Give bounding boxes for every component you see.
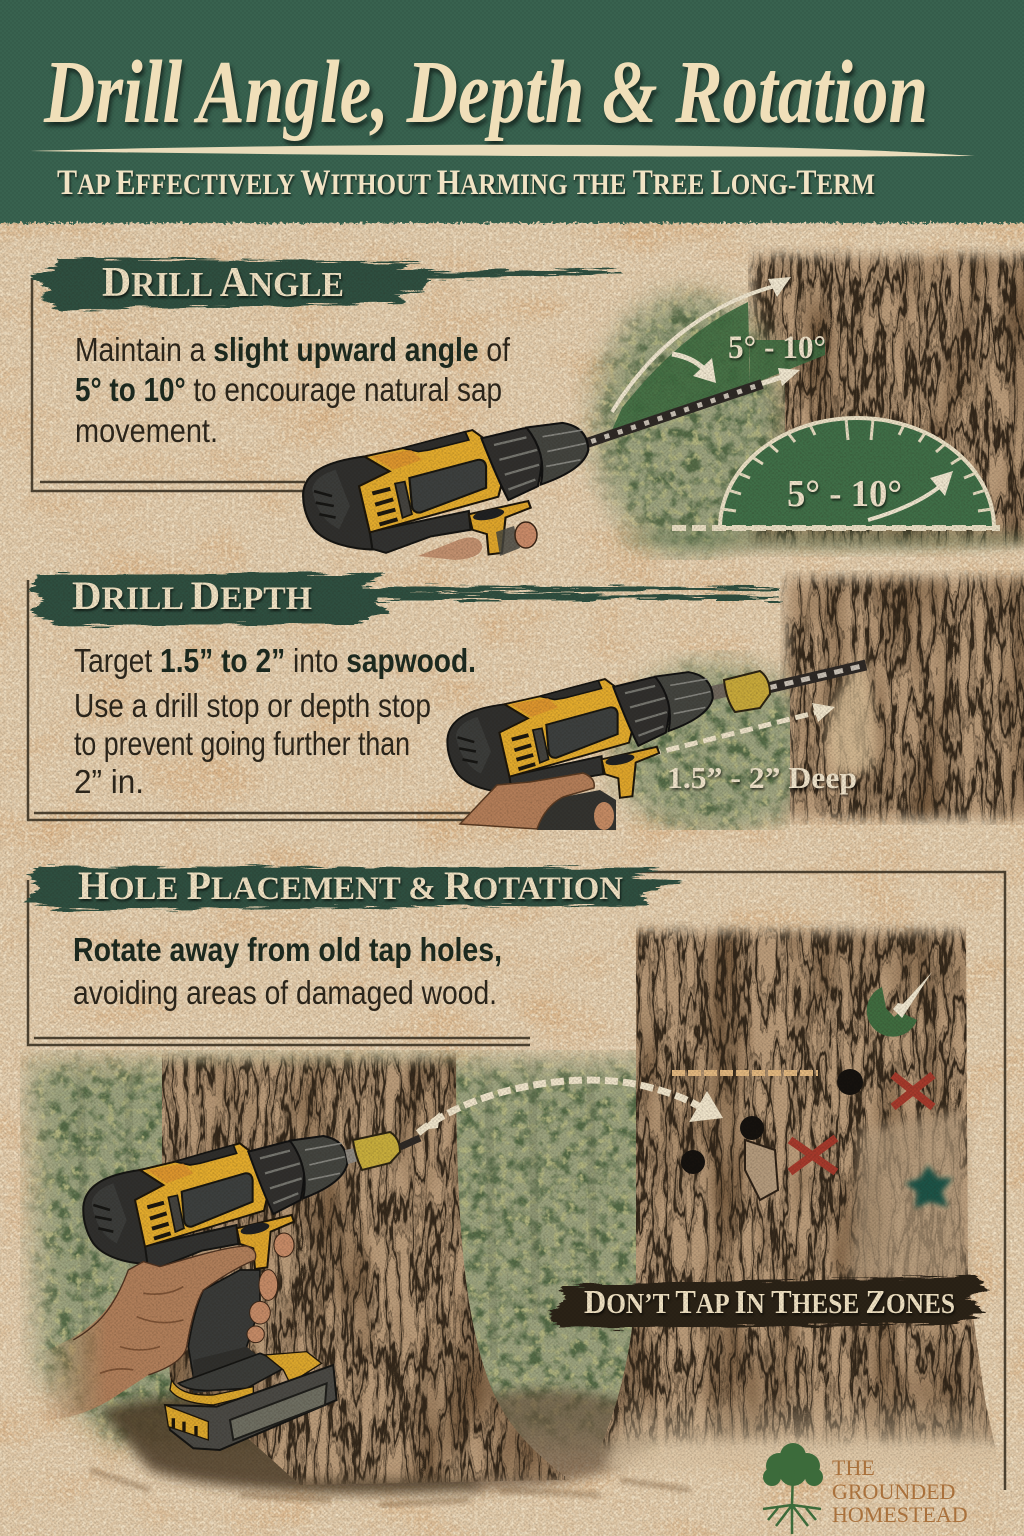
forest background [20,1050,660,1480]
frame: angle [32,278,305,491]
body text: depth: 2” in. [74,763,144,800]
good-zone check [867,972,932,1037]
body text: placement [73,931,502,1011]
logo [763,1443,968,1534]
grass under protractor [620,528,1024,552]
heading: drill depth [30,573,780,626]
tree trunk: right [590,920,1000,1470]
header band [0,0,1024,223]
logo wordmark: GROUNDED [832,1479,955,1504]
drill bit with depth stop [712,665,866,712]
body text: angle: Maintain a slight upward angle of [75,331,511,368]
tree trunk: depth [780,570,1024,825]
drill bit [578,384,762,446]
title underline swash [30,145,975,156]
body text: depth: Use a drill stop or depth stop [74,687,431,724]
heading: drill depth: DRILL DEPTH [72,573,312,618]
zone banner [548,1276,990,1328]
dark star blemish [905,1165,953,1208]
body text: placement: Rotate away from old tap holes, [73,931,502,968]
panel: drill depth [28,570,1024,830]
tree trunk: left [162,1050,570,1485]
damaged bark patch [745,1140,778,1200]
depth stop collar [345,1132,420,1170]
curved dashed arrow [418,1080,723,1133]
drill: depth [447,672,713,830]
depth arrow [648,703,835,755]
trunk base fade [605,1395,1000,1468]
drill: placement [40,1132,420,1450]
body text: angle [75,331,511,449]
logo wordmark: THE [832,1455,875,1480]
drill: angle [303,423,588,560]
red x marks [790,1075,933,1172]
body text: depth [74,642,476,800]
angle wedge diagram [612,277,826,430]
ground [90,1390,690,1505]
depth label: 1.5” - 2” Deep [667,760,857,795]
frame: placement [28,872,1005,1490]
logo wordmark: HOMESTEAD [832,1502,968,1527]
angle label: 5° - 10° [728,330,826,366]
hand and arm [40,1136,347,1450]
body text: depth: to prevent going further than [74,725,410,762]
panel: hole placement and rotation [20,863,1005,1505]
tree trunk: angle [748,245,1024,550]
heading: drill angle [30,258,622,310]
logo tree [763,1443,823,1534]
frame: depth [28,580,470,820]
marks on tree [672,972,953,1208]
heading: hole placement: HOLE PLACEMENT & ROTATION [78,863,623,908]
drilled hole area [828,655,874,775]
protractor [672,418,1000,528]
body text: angle: movement. [75,412,218,449]
body text: placement: avoiding areas of damaged wood. [73,974,497,1011]
old tap holes [681,1069,863,1174]
panel: drill angle [30,245,1024,560]
heading: drill angle: DRILL ANGLE [102,260,344,306]
zone banner: DON’T TAP IN THESE ZONES [584,1284,955,1321]
blurred damaged zone [850,1110,968,1280]
body text: angle: 5° to 10° to encourage natural sap [75,371,502,408]
protractor label: 5° - 10° [787,473,902,515]
subtitle: TAP EFFECTIVELY WITHOUT HARMING THE TREE LONG-TERM [57,162,875,202]
body text: depth: Target 1.5” to 2” into sapwood. [74,642,476,679]
foliage: depth [600,650,790,830]
foliage: angle [570,270,785,560]
